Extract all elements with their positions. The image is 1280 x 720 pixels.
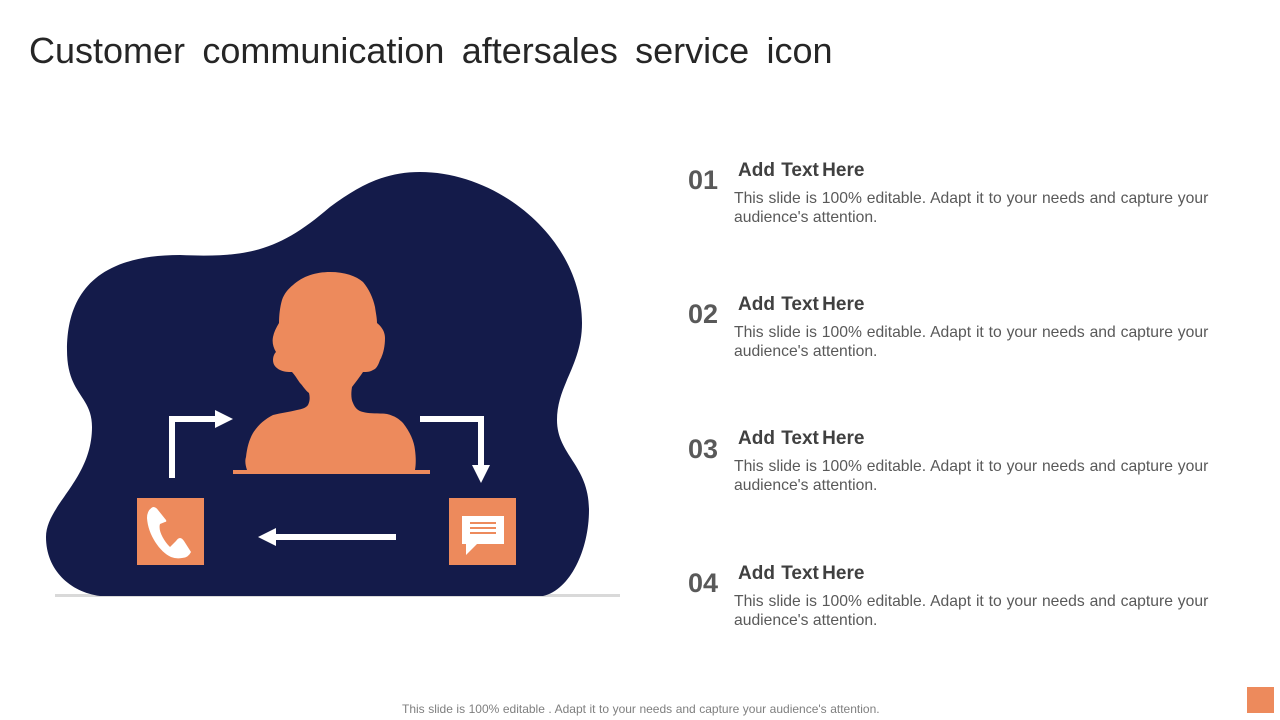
icon: agent silhouette xyxy=(233,272,430,474)
heading 04: Add Text Here xyxy=(738,563,864,584)
list item 02 xyxy=(688,294,1208,360)
number 03: 03 xyxy=(688,434,718,464)
list item 01 xyxy=(688,160,1208,226)
arrow: phone to agent xyxy=(169,410,233,478)
icon: phone tile xyxy=(137,498,204,565)
body line 04 continued: audience's attention. xyxy=(734,612,877,629)
list item 03 xyxy=(688,428,1208,494)
body line 03 continued: audience's attention. xyxy=(734,477,877,494)
icon: message tile xyxy=(449,498,516,565)
body line 02: This slide is 100% editable. Adapt it to your needs and capture your xyxy=(734,324,1208,341)
blob background xyxy=(46,172,589,596)
body line 01: This slide is 100% editable. Adapt it to your needs and capture your xyxy=(734,190,1208,207)
title: Customer communication aftersales service icon xyxy=(29,30,832,71)
ground line xyxy=(55,594,620,597)
arrow: agent to message xyxy=(420,416,490,483)
body line 02 continued: audience's attention. xyxy=(734,343,877,360)
heading 03: Add Text Here xyxy=(738,428,864,449)
arrow: message to phone xyxy=(258,528,396,546)
list item 04 xyxy=(688,563,1208,629)
number 01: 01 xyxy=(688,165,718,195)
body line 04: This slide is 100% editable. Adapt it to your needs and capture your xyxy=(734,593,1208,610)
footer note: This slide is 100% editable . Adapt it to your needs and capture your audience's attention. xyxy=(402,702,880,716)
heading 02: Add Text Here xyxy=(738,294,864,315)
number 04: 04 xyxy=(688,568,718,598)
corner square xyxy=(1247,687,1274,713)
body line 01 continued: audience's attention. xyxy=(734,209,877,226)
body line 03: This slide is 100% editable. Adapt it to your needs and capture your xyxy=(734,458,1208,475)
illustration: customer service cycle xyxy=(46,172,620,597)
heading 01: Add Text Here xyxy=(738,160,864,181)
number 02: 02 xyxy=(688,299,718,329)
